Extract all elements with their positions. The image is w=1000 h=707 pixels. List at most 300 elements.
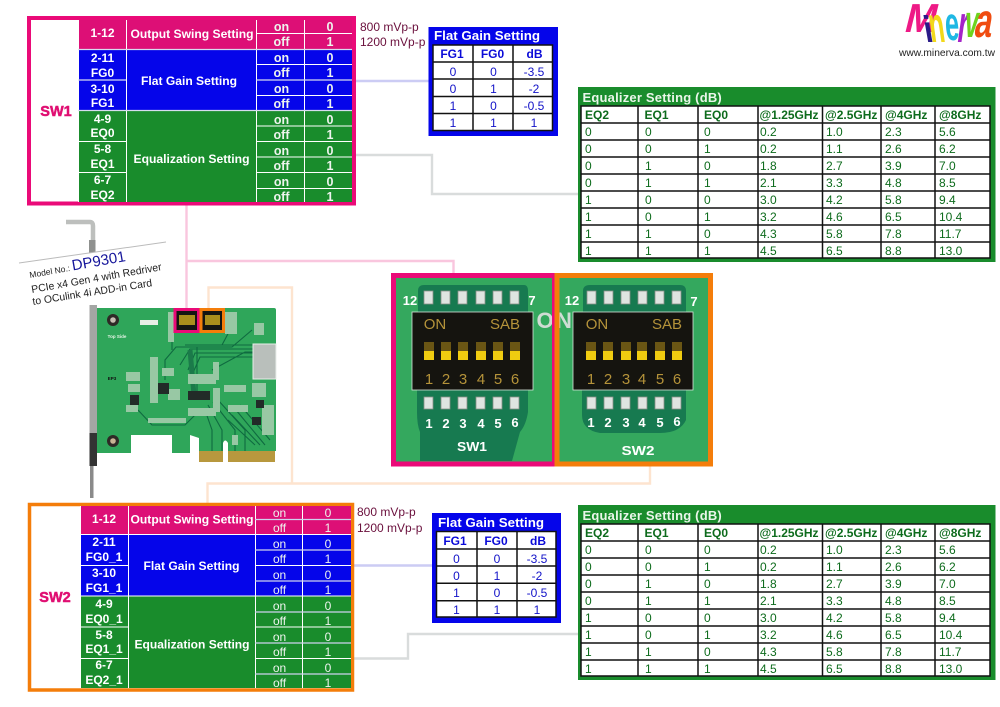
on/off values: [274, 20, 334, 204]
panel: SW1 equalizer table: 0: [645, 210, 652, 224]
on/off values: on: [273, 537, 286, 551]
panel: SW2 equalizer table: 1: [704, 560, 711, 574]
panel: SW2 equalizer table: 0: [585, 560, 592, 574]
pin numbers: 7: [528, 293, 536, 308]
pin labels: 2-11: [91, 51, 115, 65]
silkscreen: Top Side: [108, 334, 127, 339]
pin labels: EQ2: [90, 188, 115, 202]
on/off values: 1: [327, 35, 334, 49]
panel: SW1 switch photo: [394, 276, 554, 464]
panel: SW1 flat gain table: dB: [526, 47, 543, 61]
panel: SW2 equalizer table: 3.3: [826, 594, 843, 608]
on/off values: 0: [327, 144, 334, 158]
pin numbers: 12: [565, 293, 579, 308]
panel: SW1 equalizer table: 0.2: [760, 125, 777, 139]
gold fingers: [199, 451, 275, 462]
panel: SW2 equalizer table: 0: [704, 645, 711, 659]
panel: SW1 equalizer table: @8GHz: [939, 108, 981, 122]
pin numbers: SW1: [457, 439, 487, 454]
panel: SW2 equalizer table: 0: [645, 543, 652, 557]
panel: SW1 equalizer table: 9.4: [939, 193, 956, 207]
panel: SW2 flat gain table: 0: [453, 552, 460, 566]
on/off values: 0: [327, 175, 334, 189]
panel: SW2 equalizer table: @8GHz: [939, 526, 981, 540]
pin labels: FG1: [91, 96, 114, 110]
pin numbers: [565, 293, 698, 458]
panel: SW1 flat gain table: 0: [450, 65, 457, 79]
on/off values: 1: [325, 552, 332, 566]
panel: SW1 equalizer table: 5.8: [826, 227, 843, 241]
panel: SW1 equalizer table: EQ2: [585, 108, 609, 122]
mini switches: [175, 310, 224, 332]
panel: SW1 equalizer table: 8.5: [939, 176, 956, 190]
panel: SW1 flat gain table: -2: [529, 82, 540, 96]
panel: SW2 equalizer table: 3.9: [885, 577, 902, 591]
components: [126, 312, 274, 445]
on/off values: 0: [327, 82, 334, 96]
pin numbers: 7: [690, 294, 698, 309]
panel: SW1 equalizer table: 4.2: [826, 193, 843, 207]
on/off values: 0: [327, 51, 334, 65]
panel: SW1 equalizer table: 0: [704, 125, 711, 139]
on/off values: off: [273, 645, 287, 659]
panel: SW1 flat gain table: 0: [490, 65, 497, 79]
panel: SW1 equalizer table: 0: [704, 159, 711, 173]
panel: SW1 flat gain table: 1: [450, 116, 457, 130]
pin labels: 1-12: [90, 26, 115, 40]
panel: SW2 equalizer table: 1.8: [760, 577, 777, 591]
panel: SW2 equalizer table: 1: [704, 628, 711, 642]
panel: SW2 equalizer table: 8.8: [885, 662, 902, 676]
panel: SW2 equalizer table: 0: [704, 611, 711, 625]
header pins: [140, 320, 158, 325]
panel: SW2 settings: [30, 504, 352, 690]
body markings: 4: [638, 371, 646, 388]
pin labels: FG1_1: [86, 581, 123, 595]
silkscreen ON: N: [556, 308, 572, 333]
on/off values: off: [274, 35, 290, 49]
on/off values: on: [274, 113, 289, 127]
panel: SW2 equalizer table: 7.8: [885, 645, 902, 659]
panel: SW1 equalizer table: 11.7: [939, 227, 962, 241]
panel: SW2 flat gain table: Flat Gain Setting: [438, 515, 544, 530]
pin numbers: 6: [673, 414, 681, 429]
on/off values: 1: [325, 614, 332, 628]
bottom pads: [587, 397, 681, 409]
panel: SW2 flat gain table: FG1: [443, 534, 467, 548]
panel: SW2 equalizer table: 0: [585, 577, 592, 591]
on/off values: 1: [327, 97, 334, 111]
pin labels: FG0_1: [86, 550, 123, 564]
panel: SW2 equalizer table: 4.6: [826, 628, 843, 642]
panel: SW2 equalizer table: 0: [585, 543, 592, 557]
on/off values: on: [273, 599, 286, 613]
on/off values: on: [274, 144, 289, 158]
switch body: [573, 312, 693, 390]
on/off values: on: [273, 661, 286, 675]
panel: SW2 equalizer table: 4.5: [760, 662, 777, 676]
PCIe bracket: [66, 222, 97, 498]
swing voltage notes SW1: 800 mVp-p: [360, 20, 419, 34]
on/off values: off: [273, 676, 287, 690]
chips: [130, 383, 264, 425]
panel: SW2 flat gain table: dB: [530, 534, 546, 548]
on/off values: 1: [325, 521, 332, 535]
panel: SW1 equalizer table: @4GHz: [885, 108, 927, 122]
pin labels: 4-9: [94, 112, 111, 126]
pin labels: EQ1: [90, 157, 115, 171]
panel: SW1 flat gain table: 0: [490, 99, 497, 113]
panel: SW2 equalizer table: 3.0: [760, 611, 777, 625]
panel: SW2 equalizer table: 5.8: [885, 611, 902, 625]
on/off values: 1: [325, 583, 332, 597]
panel: SW1 equalizer table: 6.2: [939, 142, 956, 156]
panel: SW1 equalizer table: 1: [645, 176, 652, 190]
pin labels: EQ2_1: [85, 673, 123, 687]
on/off values: 1: [327, 159, 334, 173]
panel: SW2 flat gain table: [432, 513, 561, 623]
panel: SW1 equalizer table: 7.0: [939, 159, 956, 173]
panel: SW2 equalizer table: 1: [585, 645, 592, 659]
body markings: 3: [622, 371, 630, 388]
panel: SW1 equalizer table: 1: [585, 210, 592, 224]
panel: SW2 switch photo: [556, 276, 710, 464]
swing voltage notes SW2: [357, 505, 423, 535]
panel: SW1 equalizer table: 2.3: [885, 125, 902, 139]
swing voltage notes SW1: 1200 mVp-p: [360, 35, 426, 49]
on/off values: off: [273, 583, 287, 597]
pin labels: 6-7: [95, 658, 113, 672]
on/off values: 0: [325, 630, 332, 644]
on/off values: on: [274, 82, 289, 96]
on/off values: on: [274, 20, 289, 34]
panel: SW2 equalizer table: 5.8: [826, 645, 843, 659]
body markings: SAB: [490, 316, 520, 333]
pin numbers: 4: [477, 416, 485, 431]
panel: SW1 equalizer table: 1: [645, 227, 652, 241]
swing voltage notes SW1: [360, 20, 426, 49]
panel: SW1 equalizer table: 5.6: [939, 125, 956, 139]
panel: SW1 equalizer table: EQ1: [644, 108, 669, 122]
panel: SW2 equalizer table: 6.2: [939, 560, 956, 574]
panel: SW1 equalizer table: 1.8: [760, 159, 777, 173]
on/off values: 1: [325, 645, 332, 659]
on/off values: 1: [327, 128, 334, 142]
panel: SW2 equalizer table: 1: [585, 662, 592, 676]
panel: SW2 equalizer table: 1: [585, 611, 592, 625]
pin numbers: 2: [604, 415, 612, 430]
panel: SW2 equalizer table: 1: [704, 662, 711, 676]
panel: SW2 equalizer table: 0: [645, 560, 652, 574]
on/off values: off: [274, 190, 290, 204]
connector lines: [186, 81, 650, 658]
on/off values: on: [274, 51, 289, 65]
pin numbers: 3: [459, 416, 467, 431]
panel: SW2 equalizer table: 1: [645, 645, 652, 659]
panel: SW1 equalizer table: 5.8: [885, 193, 902, 207]
pin labels: EQ0_1: [85, 612, 123, 626]
panel: SW1 equalizer table: 1.1: [826, 142, 843, 156]
panel: SW1 flat gain table: 1: [531, 116, 538, 130]
on/off values: off: [273, 614, 287, 628]
panel: SW2 equalizer table: @4GHz: [885, 526, 927, 540]
setting names: [130, 512, 254, 652]
panel: SW2 equalizer table: EQ1: [644, 526, 669, 540]
on/off values: on: [273, 630, 286, 644]
pin numbers: 1: [587, 415, 595, 430]
panel: SW1 equalizer table: 10.4: [939, 210, 963, 224]
on/off values: on: [273, 568, 286, 582]
body markings: ON: [424, 316, 446, 333]
panel: SW1 equalizer table: 1: [704, 210, 711, 224]
panel: SW1 equalizer table: 0: [704, 193, 711, 207]
panel: SW2 equalizer table: 6.5: [885, 628, 902, 642]
setting names: Flat Gain Setting: [144, 559, 240, 573]
setting names: Output Swing Setting: [130, 27, 254, 41]
panel: SW2 equalizer table: 9.4: [939, 611, 956, 625]
panel: SW1 equalizer table: 1.0: [826, 125, 843, 139]
panel: SW1 equalizer table: 3.0: [760, 193, 777, 207]
panel: SW1 flat gain table: FG0: [481, 47, 504, 61]
panel: SW2 equalizer table: 0: [704, 543, 711, 557]
panel: SW1 equalizer table: 13.0: [939, 244, 963, 258]
panel: SW1 flat gain table: 1: [450, 99, 457, 113]
pin labels: FG0: [91, 66, 114, 80]
panel: SW2 equalizer table: @1.25GHz: [760, 526, 819, 540]
panel: SW2 equalizer table: 1.0: [826, 543, 843, 557]
panel: SW1 equalizer table: 4.3: [760, 227, 777, 241]
heading: SW2: SW2: [39, 590, 71, 606]
switch body: [412, 312, 533, 390]
pin numbers: 5: [656, 415, 664, 430]
panel: SW1 equalizer table: 0: [585, 142, 592, 156]
pin numbers: SW2: [622, 443, 654, 458]
panel: SW1 equalizer table: 4.5: [760, 244, 777, 258]
body markings: 3: [459, 371, 467, 388]
panel: SW2 equalizer table: 6.5: [826, 662, 843, 676]
panel: SW1 flat gain table: 1: [490, 82, 497, 96]
pin labels: 4-9: [95, 597, 113, 611]
panel: SW1 equalizer table: 3.3: [826, 176, 843, 190]
on/off values: off: [274, 97, 290, 111]
pin numbers: 2: [442, 416, 450, 431]
panel: SW2 flat gain table: -3.5: [527, 552, 548, 566]
panel: SW1 flat gain table: Flat Gain Setting: [434, 28, 540, 43]
panel: SW1 flat gain table: 1: [490, 116, 497, 130]
setting names: Equalization Setting: [134, 638, 250, 652]
panel: SW2 equalizer table: 3.2: [760, 628, 777, 642]
body markings: 2: [442, 371, 450, 388]
panel: SW1 equalizer table: 0: [585, 176, 592, 190]
on/off values: 0: [325, 506, 332, 520]
panel: SW1 equalizer table: Equalizer Setting (dB): [582, 90, 722, 105]
on/off values: off: [273, 552, 287, 566]
screws: [107, 314, 119, 447]
swing voltage notes SW2: 800 mVp-p: [357, 505, 416, 519]
panel: SW1 equalizer table: 0: [704, 227, 711, 241]
panel: SW1 equalizer table: 1: [645, 244, 652, 258]
body markings: 6: [673, 371, 681, 388]
panel: SW1 equalizer table: 0.2: [760, 142, 777, 156]
on/off values: on: [273, 506, 286, 520]
panel: SW2 equalizer table: 2.6: [885, 560, 902, 574]
logo: Minerva: i: [920, 10, 936, 51]
setting names: Equalization Setting: [134, 152, 250, 166]
logo url: www.minerva.com.tw: [898, 47, 995, 59]
on/off values: 1: [325, 676, 332, 690]
panel: SW2 equalizer table: 4.2: [826, 611, 843, 625]
silkscreen ON: O: [536, 308, 554, 333]
panel: SW1 equalizer table: 0: [585, 125, 592, 139]
pin labels: 3-10: [92, 566, 116, 580]
panel: SW1 equalizer table: 4.8: [885, 176, 902, 190]
panel: SW2 flat gain table: -2: [532, 569, 543, 583]
panel: SW2 equalizer table: 4.8: [885, 594, 902, 608]
panel: SW1 flat gain table: -0.5: [524, 99, 545, 113]
body markings: 5: [656, 371, 664, 388]
panel: SW1 equalizer table: 1: [585, 227, 592, 241]
pin numbers: [403, 293, 536, 454]
panel: SW2 equalizer table: 1: [645, 577, 652, 591]
panel: SW1 equalizer table: 3.2: [760, 210, 777, 224]
panel: SW1 equalizer table: 1: [704, 142, 711, 156]
panel: SW1 equalizer table: 0: [645, 142, 652, 156]
panel: SW2 equalizer table: 2.7: [826, 577, 843, 591]
body markings: 6: [511, 371, 519, 388]
panel: SW2 equalizer table: 4.3: [760, 645, 777, 659]
panel: SW1 equalizer table: 7.8: [885, 227, 902, 241]
panel: SW1 equalizer table: 4.6: [826, 210, 843, 224]
product description: PCIe x4 Gen 4 with Redriver: [30, 261, 163, 296]
on/off values: 0: [327, 113, 334, 127]
pin numbers: 1: [425, 416, 433, 431]
body markings: [424, 316, 520, 388]
panel: SW2 equalizer table: 11.7: [939, 645, 962, 659]
on/off values: 0: [325, 568, 332, 582]
panel: SW2 flat gain table: 0: [453, 569, 460, 583]
panel: SW1 equalizer table: 1: [585, 193, 592, 207]
panel: SW2 equalizer table: 1: [645, 662, 652, 676]
panel: SW2 equalizer table: 5.6: [939, 543, 956, 557]
pin labels: EQ1_1: [85, 642, 123, 656]
panel: SW1 equalizer table: 0: [645, 125, 652, 139]
panel: SW2 equalizer table: @2.5GHz: [825, 526, 877, 540]
pin numbers: 5: [494, 416, 502, 431]
body markings: ON: [586, 316, 608, 333]
panel: SW2 flat gain table: 1: [494, 603, 501, 617]
panel: SW1 equalizer table: 6.5: [885, 210, 902, 224]
panel: SW1 equalizer table: 1: [704, 244, 711, 258]
panel: SW1 equalizer table: 2.7: [826, 159, 843, 173]
model number: Model No.: DP9301: [28, 248, 127, 282]
panel: SW2 equalizer table: 8.5: [939, 594, 956, 608]
panel: SW2 equalizer table: 10.4: [939, 628, 963, 642]
panel: SW2 equalizer table: 0.2: [760, 543, 777, 557]
swing voltage notes SW2: 1200 mVp-p: [357, 521, 423, 535]
body markings: 4: [477, 371, 485, 388]
panel: SW1 equalizer table: @2.5GHz: [825, 108, 877, 122]
logo: Minerva: [898, 0, 999, 59]
panel: SW2 equalizer table: 7.0: [939, 577, 956, 591]
panel: SW1 equalizer table: 0: [645, 193, 652, 207]
panel: SW1 equalizer table: 1: [704, 176, 711, 190]
body markings: [586, 316, 682, 388]
panel: SW2 equalizer table: 2.1: [760, 594, 777, 608]
panel: SW2 equalizer table: 1: [704, 594, 711, 608]
panel: SW2 equalizer table: 1: [645, 594, 652, 608]
panel: SW1 flat gain table: [428, 27, 558, 136]
pin labels: 6-7: [94, 173, 111, 187]
pin numbers: 6: [511, 415, 519, 430]
pin labels: [90, 26, 115, 202]
panel: SW1 equalizer table: [578, 87, 996, 262]
PCB board: [97, 308, 276, 462]
on/off values: 1: [327, 66, 334, 80]
pin labels: EQ0: [90, 126, 115, 140]
on/off values: off: [274, 128, 290, 142]
panel: SW2 flat gain table: 1: [453, 603, 460, 617]
on/off values: 0: [325, 599, 332, 613]
heading: SW1: SW1: [40, 104, 72, 120]
panel: SW2 flat gain table: FG0: [484, 534, 508, 548]
on/off values: off: [273, 521, 287, 535]
panel: SW2 equalizer table: 1.1: [826, 560, 843, 574]
panel: SW2 equalizer table: Equalizer Setting (dB): [582, 508, 722, 523]
panel: SW2 equalizer table: 2.3: [885, 543, 902, 557]
on/off values: 0: [327, 20, 334, 34]
panel: SW2 flat gain table: 1: [534, 603, 541, 617]
on/off values: 0: [325, 537, 332, 551]
body markings: 5: [494, 371, 502, 388]
panel: SW2 equalizer table: 0: [704, 577, 711, 591]
panel: SW1 flat gain table: -3.5: [524, 65, 545, 79]
pin numbers: 3: [622, 415, 630, 430]
pin labels: 5-8: [94, 142, 111, 156]
bottom pads: [424, 397, 519, 409]
panel: SW2 equalizer table: [578, 505, 996, 680]
pin numbers: 12: [403, 293, 417, 308]
body markings: 1: [425, 371, 433, 388]
panel: SW2 equalizer table: EQ0: [704, 526, 728, 540]
panel: SW2 flat gain table: -0.5: [527, 586, 548, 600]
panel: SW2 flat gain table: 0: [494, 586, 501, 600]
panel: SW1 equalizer table: EQ0: [704, 108, 728, 122]
panel: SW1 equalizer table: 2.1: [760, 176, 777, 190]
body markings: SAB: [652, 316, 682, 333]
switch sliders: [424, 342, 520, 360]
pad area: [573, 285, 693, 433]
top pads: [424, 291, 519, 304]
panel: SW1 flat gain table: FG1: [440, 47, 464, 61]
panel: SW1 settings: [29, 18, 354, 204]
product label card: to OCulink 4i ADD-in Card: [32, 277, 153, 308]
panel: SW2 equalizer table: 0: [585, 594, 592, 608]
pin labels: 3-10: [90, 82, 115, 96]
setting names: Flat Gain Setting: [141, 74, 237, 88]
panel: SW1 flat gain table: 0: [450, 82, 457, 96]
panel: SW2 flat gain table: 1: [453, 586, 460, 600]
panel: SW1 equalizer table: 2.6: [885, 142, 902, 156]
panel: SW2 flat gain table: 1: [494, 569, 501, 583]
panel: SW1 equalizer table: 6.5: [826, 244, 843, 258]
switch sliders: [586, 342, 682, 360]
panel: SW1 equalizer table: 1: [645, 159, 652, 173]
panel: SW1 equalizer table: 3.9: [885, 159, 902, 173]
setting names: [130, 27, 254, 166]
pin labels: [85, 512, 123, 687]
on/off values: 1: [327, 190, 334, 204]
traces: [138, 320, 270, 451]
